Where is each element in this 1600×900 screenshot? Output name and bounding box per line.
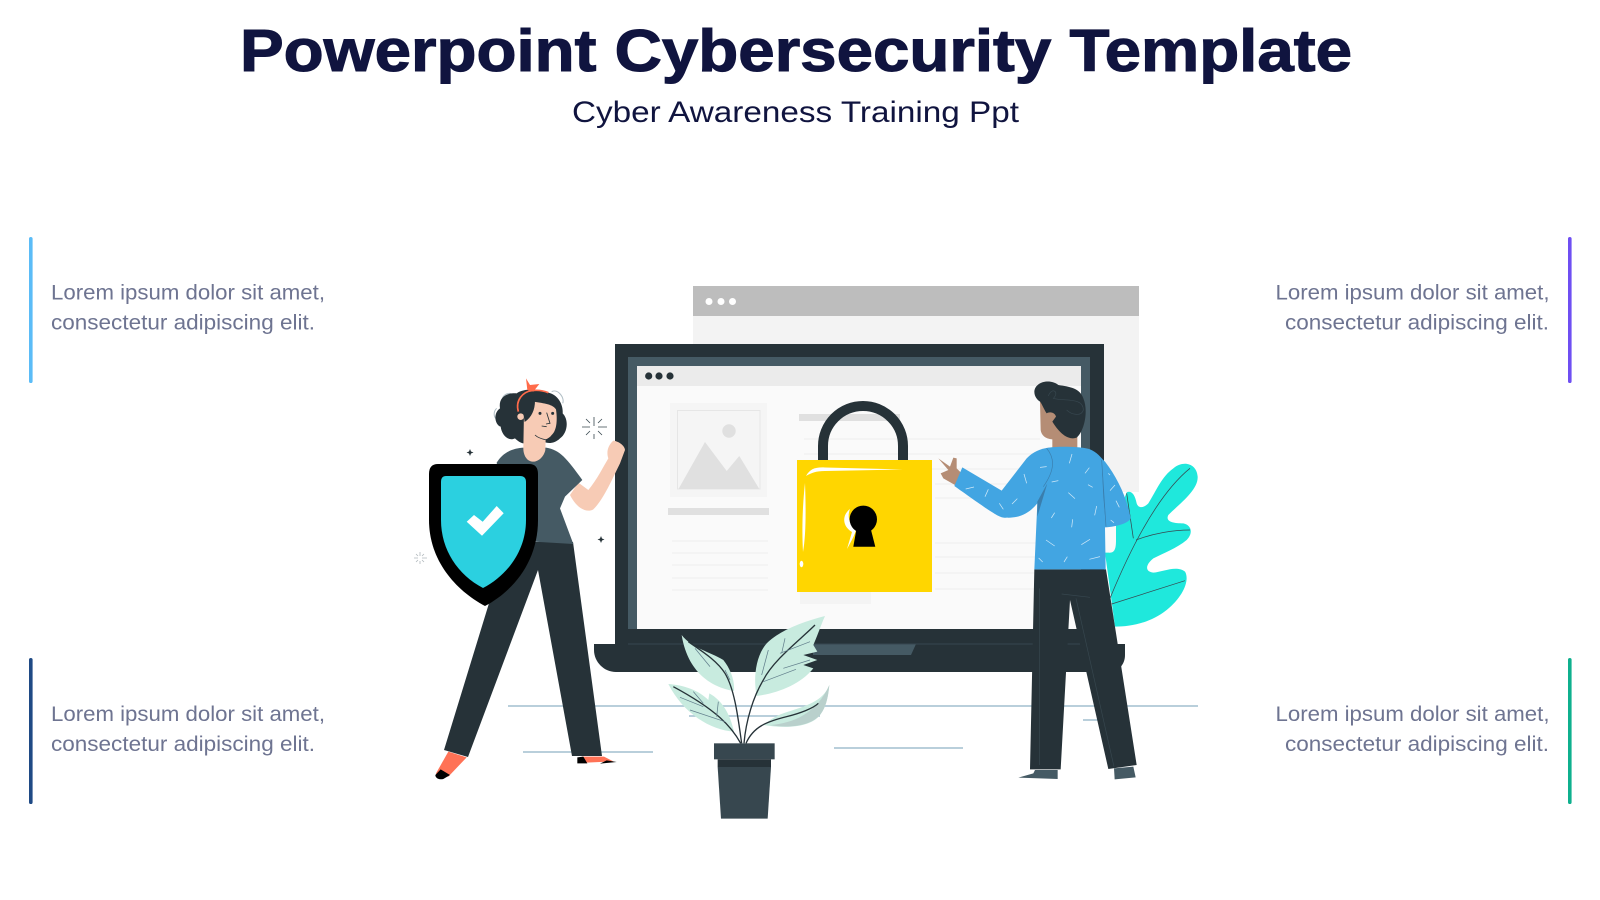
man: trousers and shoes xyxy=(1018,569,1137,779)
text block: top right: Lorem ipsum dolor sit amet, xyxy=(1276,282,1550,304)
sparkles xyxy=(414,417,607,564)
text block: bottom right xyxy=(1276,658,1572,804)
title: Powerpoint Cybersecurity Template xyxy=(240,18,1352,84)
woman: shirt xyxy=(497,448,582,544)
text block: top right xyxy=(1276,237,1572,383)
subtitle: Cyber Awareness Training Ppt xyxy=(572,96,1020,129)
text block: bottom left: consectetur adipiscing elit. xyxy=(51,733,315,756)
teal leaf xyxy=(1105,464,1198,627)
man: torso, arm, head xyxy=(938,382,1131,569)
woman: arm xyxy=(570,441,625,511)
screen content: text lines xyxy=(799,414,1040,604)
woman: head and hair xyxy=(494,378,567,462)
back browser window xyxy=(693,286,1139,492)
text block: top left xyxy=(29,237,325,383)
icon: padlock xyxy=(797,406,932,592)
text block: bottom left: Lorem ipsum dolor sit amet, xyxy=(51,703,325,726)
woman: trousers xyxy=(444,542,602,757)
woman: shoes xyxy=(435,752,617,779)
illustration: cybersecurity scene xyxy=(414,286,1198,819)
woman holding shield xyxy=(429,378,625,779)
text block: top left: consectetur adipiscing elit. xyxy=(51,312,315,334)
text block: top left: Lorem ipsum dolor sit amet, xyxy=(51,282,325,304)
text block: bottom right: consectetur adipiscing elit. xyxy=(1285,733,1549,756)
screen content: image placeholder xyxy=(668,403,769,590)
plant pot xyxy=(714,743,775,819)
text block: bottom right: Lorem ipsum dolor sit amet, xyxy=(1276,703,1550,726)
text block: bottom left xyxy=(29,658,325,804)
laptop xyxy=(594,344,1125,672)
potted plant xyxy=(668,616,829,819)
plant leaves xyxy=(668,616,829,743)
man pointing at padlock xyxy=(938,382,1137,779)
text block: top right: consectetur adipiscing elit. xyxy=(1285,312,1549,334)
ground lines xyxy=(508,706,1198,752)
icon: security shield xyxy=(429,464,538,606)
